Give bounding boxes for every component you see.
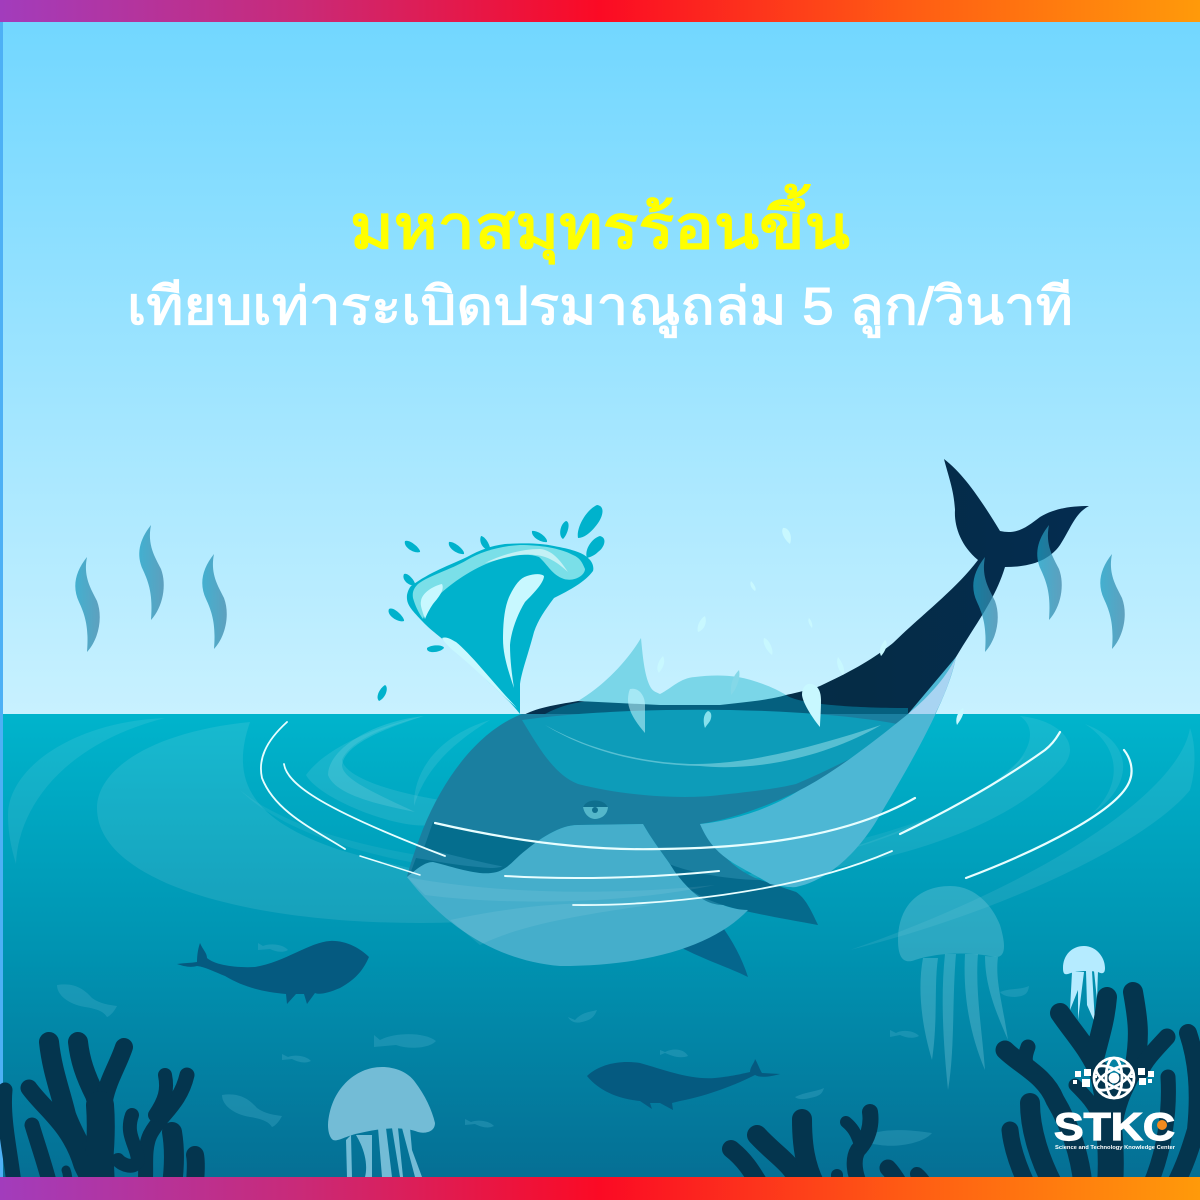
coral centre [731,1112,926,1185]
large left ripple lobe [97,722,690,923]
belly light [407,824,748,966]
spout upper sheen [485,549,568,572]
eye [583,800,608,819]
whale tail and back [522,459,1089,716]
logo atom icon [1093,1058,1135,1098]
STKC logo [1054,1058,1175,1151]
small jellyfish tentacles [1070,971,1098,1023]
water spout [378,505,604,714]
light beam on whale tail [908,657,956,714]
right ripple lobe [720,716,1070,880]
belly water streaks [407,877,715,945]
heat wisp right 3 [1100,554,1125,649]
far right upper crescent [1085,724,1123,815]
jellyfish bottom centre-left [328,1067,435,1177]
outer left crescent [8,718,165,864]
large jellyfish tentacles [920,954,1008,1090]
heat wisp right 2 [1037,525,1062,620]
spout highlight left [421,584,443,619]
large translucent jellyfish [898,886,1008,1090]
jellyfish dome [328,1067,435,1140]
whale back water tint [522,710,903,797]
pupil [592,807,598,813]
logo wordmark: STKC [1054,1106,1175,1149]
small whale left [177,941,369,1004]
whale body above water [522,459,1089,716]
small whale right [587,1059,780,1110]
sea [3,714,1200,1178]
eye lid [583,800,608,808]
far right crescent [850,728,1194,950]
spout body [407,543,593,714]
small jellyfish dome [1063,946,1105,974]
large jellyfish dome [898,886,1004,961]
small bright jellyfish [1063,946,1105,1023]
dark lower lip band [410,856,520,874]
coral right [1005,992,1198,1185]
body shadow [407,714,908,925]
bottom gradient bar [0,1177,1200,1200]
ripple shapes on the water surface [8,716,1194,950]
inner left ripple band [306,716,440,826]
coral left [4,1042,196,1185]
ripple rings: white lines [261,722,1132,905]
dark teal back band [545,695,908,714]
crescent beside whale [414,720,490,806]
heading: white line: เทียบเท่าระเบิดปรมาณูถล่ม 5 ลูก/วินาที [127,278,1073,338]
jellyfish tentacles [346,1128,422,1177]
title [127,183,1073,338]
heat wisp left 2 [139,525,164,620]
heat wisp left 1 [75,557,100,652]
heat wisp right 1 [973,557,998,652]
spout highlight right [503,574,544,688]
flipper and throat light [700,657,956,887]
background small fish [57,943,1029,1146]
spout pale band [413,545,585,619]
heading: yellow line: มหาสมุทรร้อนขึ้น [350,183,850,265]
top gradient bar [0,0,1200,22]
spout highlight lower [442,637,517,708]
falling water drops [628,528,964,733]
inner left pale crescent [328,716,424,812]
logo orange dot [1157,1120,1167,1130]
belly flipper lower [680,925,748,977]
sky background [0,0,1200,714]
eye ball [583,807,608,819]
heat wisp left 3 [202,554,227,649]
back highlight stripe [545,725,881,767]
surface ring band [240,755,1025,880]
dark mouth band [424,822,560,867]
dark flipper bottom [660,860,818,925]
logo caption: Science and Technology Knowledge Center [1055,1145,1175,1151]
splash droplets [378,505,604,701]
whale under water [407,657,956,977]
logo pixel squares [1073,1068,1154,1087]
left edge strip [0,22,3,1178]
hump of splashing water on whale back [578,638,786,705]
